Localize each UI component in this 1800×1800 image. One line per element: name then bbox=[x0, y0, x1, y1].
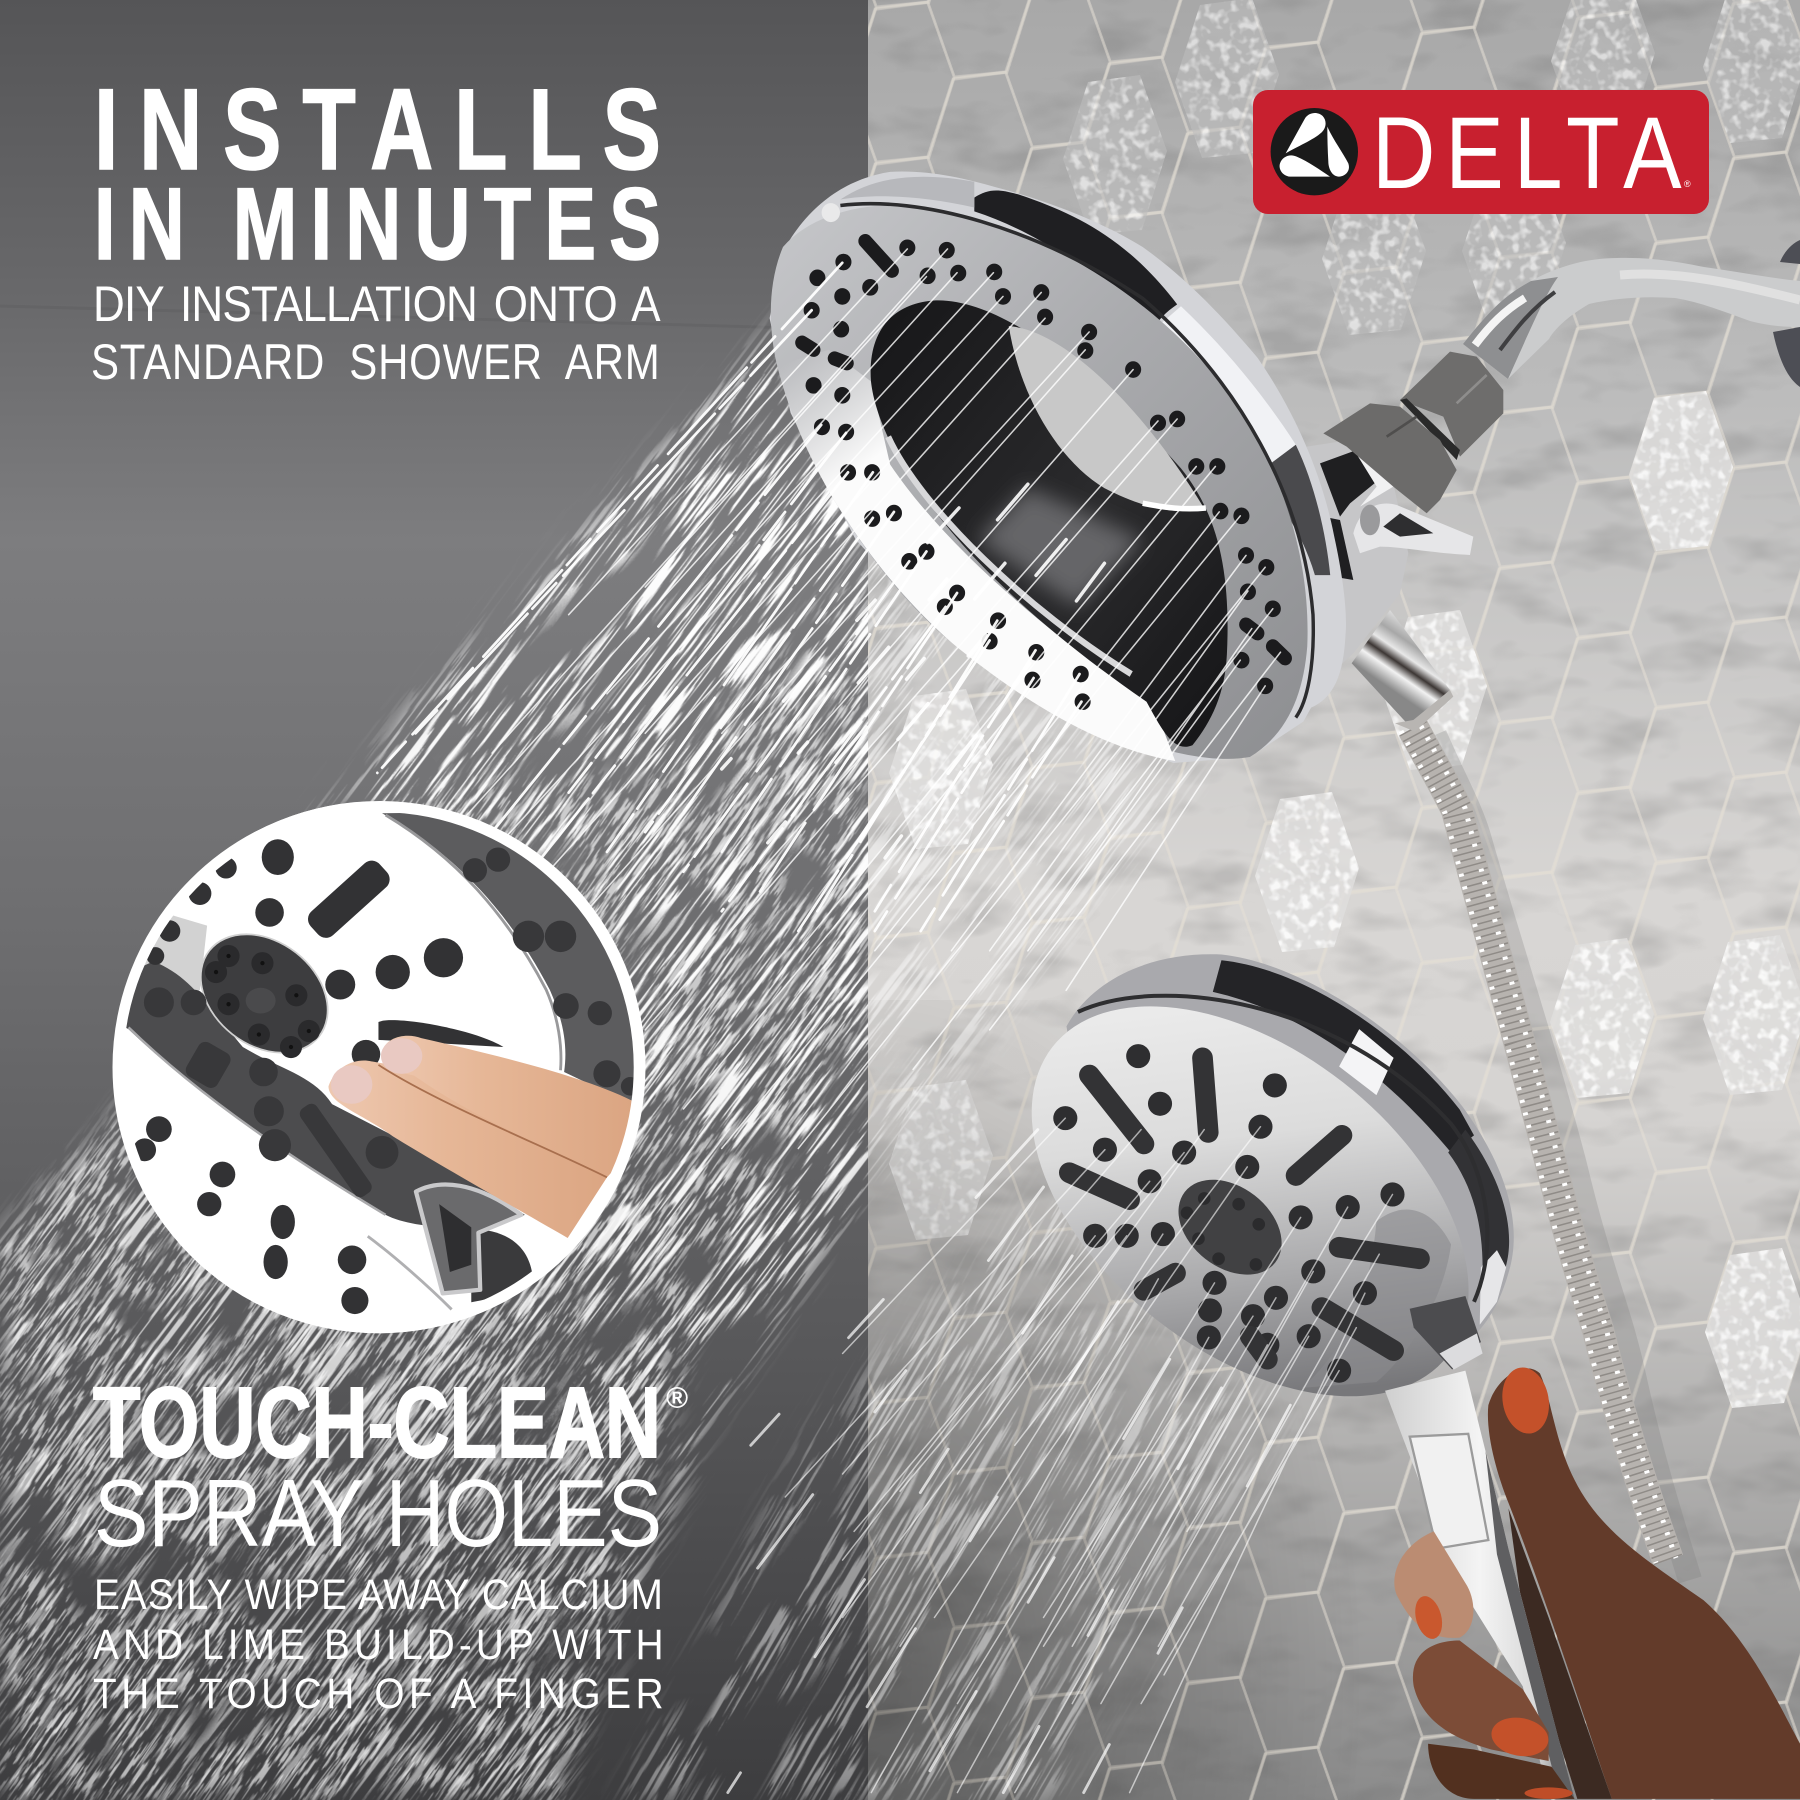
spray holes bbox=[812, 248, 1273, 702]
Delta logo badge bbox=[1253, 90, 1709, 214]
bright lower band bbox=[777, 350, 1175, 761]
dark opening bbox=[871, 300, 1228, 747]
inset upper dark ring bbox=[382, 811, 646, 1111]
flexible shower hose bbox=[1401, 726, 1690, 1580]
shower handle bbox=[1385, 1371, 1574, 1799]
text: easily wipe away calcium: THE TOUCH OF A FINGER bbox=[93, 1669, 664, 1717]
wall shading beside the grey panel bbox=[868, 1000, 1308, 1800]
lever bbox=[1353, 503, 1473, 555]
large grey nut bbox=[1323, 403, 1457, 513]
text: DIY installation: DIY INSTALLATION ONTO A bbox=[93, 275, 661, 332]
textured tiles, lower wall bbox=[889, 391, 1800, 1408]
gripping fingers with painted nails bbox=[1394, 1531, 1574, 1799]
slotted spray holes bbox=[1069, 1058, 1419, 1359]
inset dark ring below lever bbox=[471, 1229, 532, 1302]
wordmark: ® bbox=[1684, 179, 1691, 189]
inset chrome face bbox=[111, 801, 646, 1336]
sparkle bbox=[822, 203, 840, 222]
inset holes on dark chrome bbox=[144, 847, 639, 1200]
round spray holes bbox=[1065, 1056, 1392, 1371]
head face bbox=[771, 205, 1308, 759]
heading: installs in minutes: IN MINUTES bbox=[94, 168, 661, 282]
short water streaks, lower left bbox=[0, 558, 868, 1800]
inset spray nozzle cluster bbox=[177, 910, 351, 1077]
chrome outer rim bbox=[770, 172, 1346, 763]
text: easily wipe away calcium: EASILY WIPE AWAY CALCIUM bbox=[94, 1570, 663, 1618]
inset lower dark ring bbox=[121, 961, 525, 1227]
water spray texture from rain head bbox=[0, 312, 1196, 1800]
icon: Delta tri-blade mark bbox=[1271, 108, 1358, 195]
heading: touch-clean spray holes: ® bbox=[666, 1382, 688, 1415]
water jets from rain head bbox=[377, 249, 1280, 1149]
panel: marble hex tile wall bbox=[860, 0, 1800, 1800]
inset holes on bright chrome bbox=[133, 839, 503, 1314]
chrome body bbox=[1307, 442, 1408, 593]
inset two fingers bbox=[328, 1036, 632, 1238]
heading: touch-clean spray holes bbox=[93, 1367, 688, 1567]
heading: installs in minutes bbox=[94, 65, 661, 282]
chrome rim bbox=[1066, 954, 1514, 1359]
spray face bbox=[960, 928, 1541, 1475]
hex tile grout lines bbox=[868, 0, 1800, 1800]
inset chrome lever bbox=[416, 1185, 521, 1293]
hand back and thumb bbox=[1488, 1364, 1800, 1799]
thumb nail bbox=[1497, 1364, 1554, 1437]
marble veining texture bbox=[860, 0, 1800, 1800]
text: easily wipe away calcium: AND LIME BUILD-UP WITH bbox=[93, 1620, 664, 1668]
heading: installs in minutes: INSTALLS bbox=[94, 65, 661, 194]
text: easily wipe away calcium bbox=[93, 1570, 664, 1717]
view through centre opening bbox=[1009, 326, 1204, 511]
wordmark: DELTA bbox=[1372, 97, 1682, 211]
hose cone bbox=[1352, 610, 1450, 727]
heading: touch-clean spray holes: TOUCH-CLEAN bbox=[93, 1367, 661, 1479]
circular inset: finger wiping spray holes bbox=[111, 801, 646, 1336]
hand shower head bbox=[960, 928, 1541, 1475]
panel: grey left backdrop bbox=[0, 0, 868, 1800]
spray selector tab bbox=[1410, 1296, 1481, 1370]
text: DIY installation: STANDARD SHOWER ARM bbox=[91, 334, 660, 390]
rain shower head with centre opening bbox=[770, 172, 1346, 763]
heading: touch-clean spray holes: SPRAY HOLES bbox=[94, 1460, 662, 1567]
small grey nut bbox=[1400, 352, 1503, 457]
shower arm bbox=[1463, 240, 1800, 387]
wall flange bbox=[1773, 240, 1800, 387]
centre spray cluster bbox=[1160, 1160, 1300, 1294]
text: DIY installation bbox=[91, 275, 661, 390]
textured tiles, upper wall bbox=[1063, 0, 1800, 335]
swivel connector and diverter bbox=[1307, 352, 1503, 732]
water jets from hand shower bbox=[699, 1118, 1392, 1793]
